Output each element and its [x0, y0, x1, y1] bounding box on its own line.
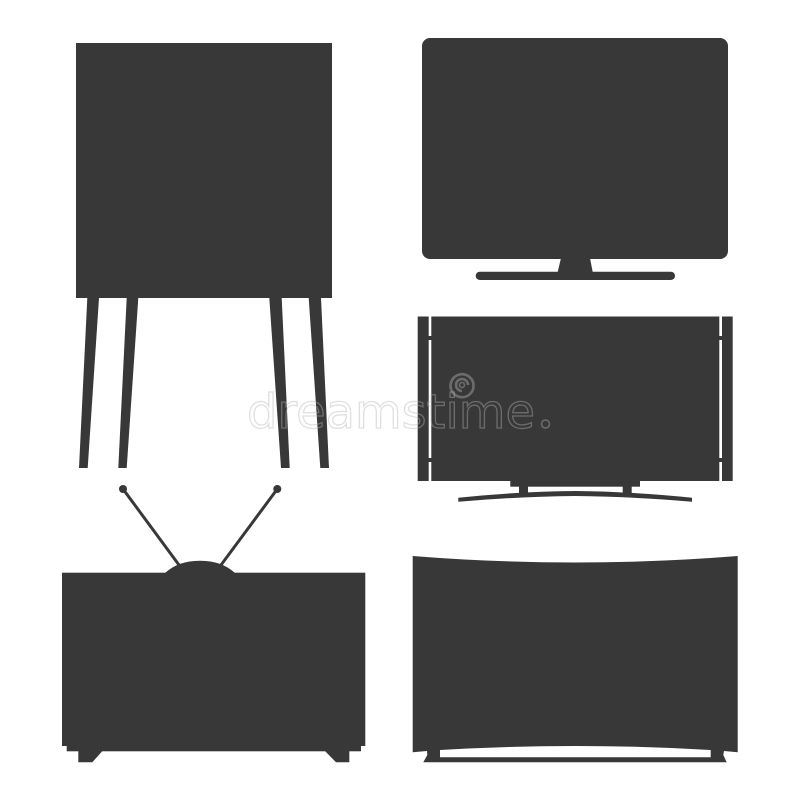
- icon: flat-screen TV with pedestal stand: [422, 38, 728, 280]
- watermark: spiral logo and wordmark: dreamstime: [247, 385, 535, 440]
- icon: curved-screen TV: [413, 556, 738, 762]
- icon: TV on four tall legs: [76, 43, 332, 468]
- icon: TV with side speakers and curved base: [418, 316, 733, 502]
- icon: retro TV with antennas: [62, 485, 365, 762]
